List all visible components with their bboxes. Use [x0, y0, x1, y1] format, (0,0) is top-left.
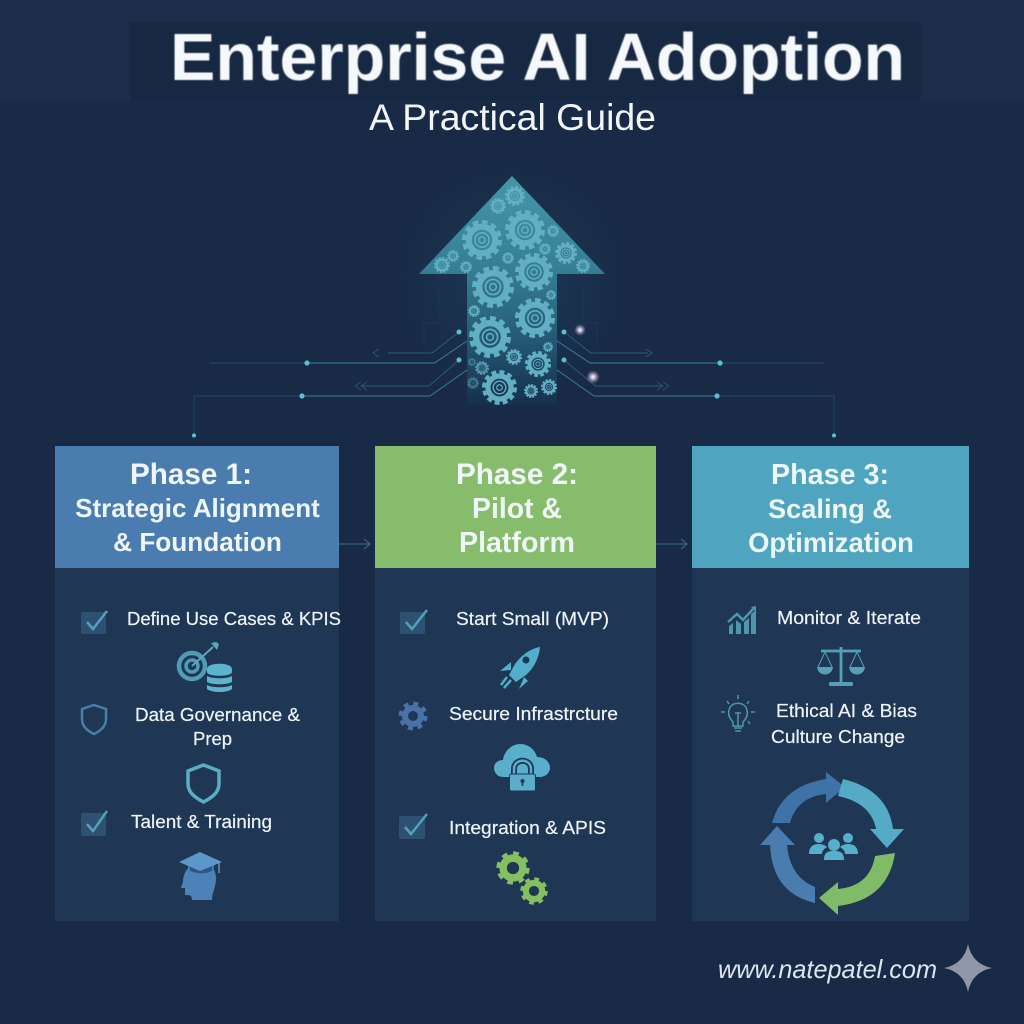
text: integration: Integration & APIS — [449, 817, 606, 838]
icon: light bulb — [721, 695, 755, 731]
cycle diagram — [760, 772, 904, 915]
arrow segment: top right — [838, 779, 904, 848]
circuit lines right — [557, 288, 836, 438]
panel: phase 2 — [375, 446, 656, 921]
text: monitor: Monitor & Iterate — [777, 607, 921, 628]
text: data governance: Data Governance & — [135, 704, 301, 725]
panel: phase 1 — [55, 446, 341, 921]
icon: large shield — [188, 765, 219, 802]
arrow: phase 1 to phase 2 — [339, 539, 370, 549]
phase 3 header: Phase 3: — [771, 459, 889, 491]
icon: check 1 — [400, 610, 427, 634]
upward arrow of gears — [392, 160, 632, 405]
icon: rocket — [500, 647, 540, 689]
icon: sparkle star — [944, 944, 992, 992]
icon: small shield — [82, 705, 106, 734]
text: talent: Talent & Training — [131, 811, 272, 832]
phase 3 header — [692, 446, 969, 568]
icon: growth chart — [728, 606, 756, 634]
text: define use cases: Define Use Cases & KPIS — [127, 608, 341, 629]
arrow segment: bottom right — [819, 853, 895, 915]
icon: cloud with lock — [494, 744, 550, 791]
phase 1 body — [55, 568, 339, 921]
phase 1 header: Phase 1: — [130, 458, 252, 491]
panel: phase 3 — [692, 446, 969, 921]
phase 1 header — [55, 446, 339, 568]
title band — [130, 22, 921, 100]
icon: target and database — [179, 642, 232, 692]
text: data governance: Prep — [193, 728, 232, 749]
icon: small gear — [400, 704, 426, 728]
phase 2 body — [375, 568, 656, 921]
circuit lines left — [192, 290, 467, 438]
icon: green gears — [499, 854, 545, 902]
phase 2 header: Pilot & — [472, 493, 562, 525]
text: secure infrastructure: Secure Infrastrcture — [449, 703, 618, 724]
text: ethical ai and culture: Ethical AI & Bias — [776, 700, 917, 721]
arrow segment: bottom left — [760, 826, 815, 903]
icon: check 3 — [399, 814, 427, 839]
phase 3 header: Optimization — [748, 527, 914, 558]
icon: people — [809, 833, 858, 860]
arrow segment: top left — [772, 772, 845, 823]
text: ethical ai and culture — [771, 700, 917, 747]
phase 1 header: & Foundation — [113, 527, 282, 557]
icon: check 1 — [81, 611, 107, 634]
phase 3 body — [692, 568, 969, 921]
icon: head with graduation cap — [179, 852, 222, 900]
text: ethical ai and culture: Culture Change — [771, 726, 905, 747]
phase 3 header: Scaling & — [768, 493, 892, 524]
subtitle: A Practical Guide — [369, 97, 656, 138]
phase 2 header — [375, 446, 656, 568]
icon: check 3 — [81, 811, 107, 836]
icon: balance scale — [817, 647, 865, 686]
text: start small: Start Small (MVP) — [456, 608, 609, 629]
phase 2 header: Phase 2: — [456, 458, 578, 491]
phase 1 header: Strategic Alignment — [75, 493, 320, 523]
arrow: phase 2 to phase 3 — [656, 539, 687, 549]
watermark url: www.natepatel.com — [718, 954, 937, 984]
text: data governance — [135, 704, 301, 749]
title: Enterprise AI Adoption — [170, 20, 905, 95]
top background strip — [0, 0, 1024, 100]
phase 2 header: Platform — [459, 527, 575, 559]
